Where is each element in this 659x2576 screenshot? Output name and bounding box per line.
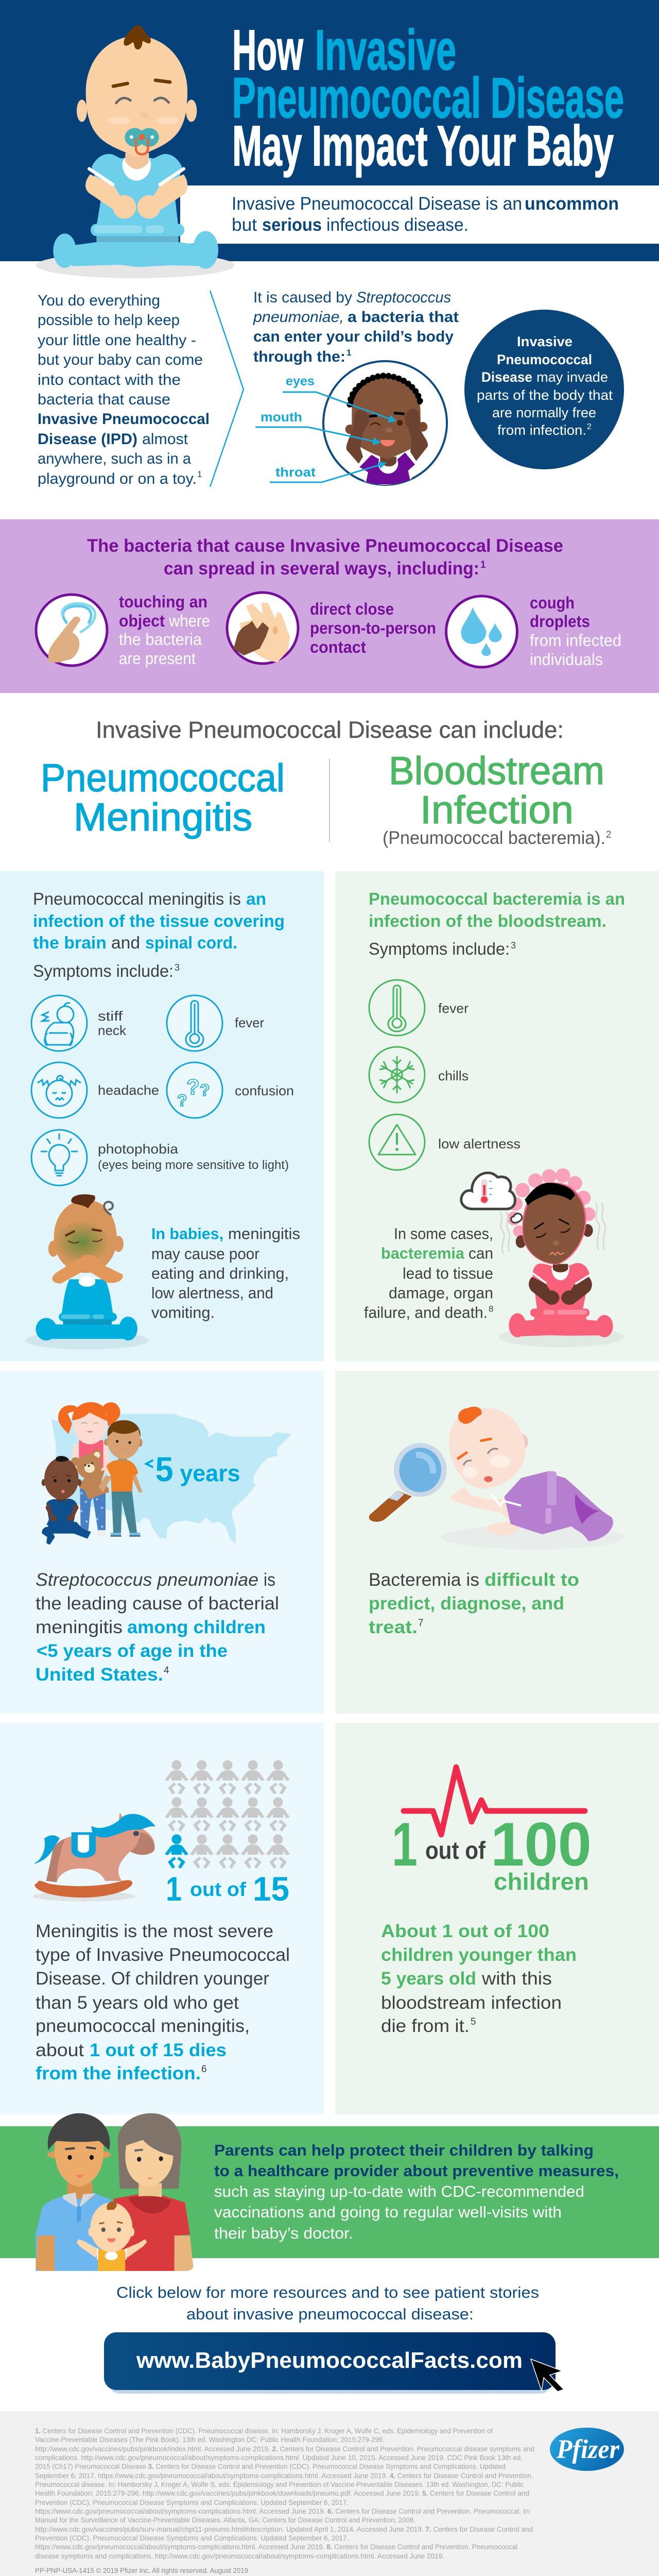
text: cough droplets: droplets bbox=[530, 612, 590, 631]
text block: intro paragraph: into contact with the bbox=[38, 371, 181, 388]
text: severity: pneumococcal meningitis, bbox=[36, 2016, 250, 2036]
text: in babies: vomiting. bbox=[151, 1303, 215, 1321]
panel: parents can help bbox=[0, 2113, 659, 2271]
text: bacteremia outcome: 8 bbox=[489, 1304, 493, 1314]
text block: intro paragraph: possible to help keep bbox=[38, 312, 180, 329]
text: severity bbox=[36, 1921, 290, 2083]
text block: cause bbox=[253, 289, 459, 365]
text: protect children: Parents can help protect their children by talking bbox=[214, 2141, 594, 2159]
subtitle: serious bbox=[262, 215, 322, 235]
panel: references footer bbox=[0, 2411, 659, 2576]
text: mortality: with this bbox=[481, 1969, 552, 1989]
icon: droplets bbox=[446, 596, 517, 667]
text: leading cause: among children bbox=[127, 1617, 266, 1637]
eyes label: eyes bbox=[286, 374, 315, 388]
references: Vaccine-Preventable Diseases (The Pink Book). 13th ed. Washington DC: Public Health Foundation; 2015:279-296. bbox=[35, 2435, 385, 2444]
text: difficult to diagnose bbox=[369, 1570, 579, 1637]
text: in babies: low alertness, and bbox=[151, 1284, 273, 1302]
stat: 1 out of 15: 1 bbox=[166, 1870, 182, 1908]
panel: how bacteria spread bbox=[0, 519, 659, 693]
references: Prevention (CDC). Pneumococcal Disease Symptoms and Complications. Updated September 6, 2017. bbox=[35, 2534, 349, 2542]
callout circle: IPD definition: parts of the body that bbox=[477, 387, 613, 403]
heading: bloodstream infection: 2 bbox=[606, 829, 612, 840]
text: severity: Meningitis is the most severe bbox=[36, 1921, 273, 1941]
icon: confusion: ? bbox=[177, 1091, 187, 1110]
text: bacteremia outcome: In some cases, bbox=[394, 1225, 493, 1243]
references: disease symptoms and complications. http://www.cdc.gov/pneumococcal/about/symptoms-complications.html. Accessed June 2019. bbox=[35, 2552, 444, 2560]
panel: meningitis under 5 years bbox=[0, 1371, 324, 1714]
definition text bbox=[369, 889, 625, 958]
stat: 1 out of 100 children: out of bbox=[425, 1837, 486, 1865]
text: severity: than 5 years old who get bbox=[36, 1993, 239, 2013]
text: in babies: In babies, bbox=[151, 1225, 223, 1243]
definition text: the brain bbox=[33, 933, 107, 952]
text: in babies: meningitis bbox=[228, 1225, 300, 1243]
text block: cause: Streptococcus bbox=[356, 289, 451, 306]
panel: bacteremia symptoms bbox=[335, 871, 659, 1361]
text: touching an object: object bbox=[119, 612, 165, 630]
references: September 6, 2017. https://www.cdc.gov/pneumococcal/about/symptoms-complications.html. Accessed June 2019. 4. Centers for Disease Control and Prevention. bbox=[35, 2471, 533, 2480]
panel: meningitis symptoms bbox=[0, 871, 324, 1361]
illustration: US map with children bbox=[42, 1402, 292, 1545]
text: touching an object: touching an bbox=[119, 592, 207, 611]
title bbox=[232, 19, 624, 178]
text: protect children: their baby’s doctor. bbox=[214, 2224, 353, 2242]
text: severity: from the infection. bbox=[36, 2063, 201, 2083]
text: difficult to diagnose: difficult to bbox=[484, 1570, 579, 1590]
text: leading cause: Streptococcus pneumoniae bbox=[36, 1570, 258, 1590]
text: touching an object bbox=[119, 592, 210, 668]
text block: intro paragraph: almost bbox=[142, 431, 188, 448]
text: touching an object: the bacteria bbox=[119, 630, 202, 649]
stat: 1 out of 15 bbox=[166, 1870, 289, 1908]
text: protect children: such as staying up-to-date with CDC-recommended bbox=[214, 2182, 584, 2200]
text block: intro paragraph: Invasive Pneumococcal bbox=[38, 411, 210, 428]
pictogram: 1 of 15 children bbox=[165, 1760, 290, 1869]
text: direct contact: direct close bbox=[310, 600, 394, 618]
references: http://www.cdc.gov/vaccines/pubs/pinkbook/index.html. Accessed June 2019. 2. Centers for Disease Control and Prevention. Pneumococcal disease symptoms and bbox=[35, 2445, 534, 2453]
heading: pneumococcal meningitis: Pneumococcal bbox=[41, 756, 285, 800]
text: mortality: bloodstream infection bbox=[381, 1993, 562, 2013]
button: website link: www.BabyPneumococcalFacts.com bbox=[136, 2348, 523, 2373]
heading: can spread in several ways, including: bbox=[164, 558, 479, 579]
text block: intro paragraph: You do everything bbox=[38, 292, 160, 309]
subtitle: uncommon bbox=[525, 194, 619, 214]
text block: cause: 1 bbox=[346, 348, 351, 358]
title: Invasive bbox=[315, 19, 456, 82]
text block: cause: pneumoniae, bbox=[253, 309, 344, 326]
label: photophobia: (eyes being more sensitive to light) bbox=[98, 1158, 289, 1172]
stat: 1 out of 15: out of bbox=[190, 1879, 246, 1901]
text: in babies: eating and drinking, bbox=[151, 1264, 289, 1282]
text: in babies bbox=[151, 1225, 300, 1321]
mouth label bbox=[255, 410, 380, 444]
references: 2015 (Ch17) Pneumococcal Disease 3. Centers for Disease Control and Prevention (CDC). Pneumococcal Disease Symptoms and Complications. Updated bbox=[35, 2462, 506, 2470]
references: https://www.cdc.gov/pneumococcal/about/symptoms-complications.html. Accessed June 2019. 6. Centers for Disease Control and Prevention. Pneumococcal. In: bbox=[35, 2507, 531, 2515]
illustration: feverish baby bbox=[461, 1168, 624, 1347]
text: protect children bbox=[214, 2141, 619, 2242]
text block: intro paragraph: but your baby can come bbox=[38, 351, 203, 368]
references: Prevention (CDC). Pneumococcal Disease Symptoms and Complications. Updated September 6, 2017. bbox=[35, 2498, 349, 2506]
definition text: spinal cord. bbox=[145, 933, 237, 952]
text block: cause: can enter your child’s body bbox=[253, 328, 454, 345]
text: leading cause: is bbox=[264, 1570, 275, 1590]
label: stiff neck: neck bbox=[98, 1023, 127, 1038]
text: bacteremia outcome: damage, organ bbox=[389, 1284, 493, 1302]
illustration: crawling baby with magnifier bbox=[369, 1406, 625, 1549]
text: difficult to diagnose: 7 bbox=[418, 1618, 424, 1629]
text block: intro paragraph: anywhere, such as in a bbox=[38, 450, 191, 467]
subtitle: Invasive Pneumococcal Disease is an bbox=[232, 194, 522, 214]
definition text: and bbox=[111, 933, 140, 952]
references: Manual for the Surveillance of Vaccine-Preventable Diseases. Atlanta, GA: Centers for Disease Control and Prevention; 2008. bbox=[35, 2516, 415, 2524]
text: mortality: children younger than bbox=[381, 1945, 577, 1965]
divider chevron bbox=[210, 291, 244, 487]
references: PP-PNP-USA-1415 © 2019 Pfizer Inc. All rights reserved. August 2019 bbox=[35, 2566, 248, 2574]
text: cough droplets: from infected bbox=[530, 631, 621, 650]
text: bacteremia outcome: can bbox=[469, 1244, 493, 1262]
text: protect children: to a healthcare provider about preventive measures, bbox=[214, 2162, 619, 2180]
icon: hands touching bbox=[227, 592, 298, 664]
heading: 1 bbox=[480, 560, 486, 570]
heading: The bacteria that cause Invasive Pneumococcal Disease bbox=[87, 536, 563, 556]
panel: bacteremia difficult to diagnose bbox=[335, 1371, 659, 1714]
definition text: Pneumococcal meningitis is bbox=[33, 889, 241, 908]
callout circle: IPD definition: Invasive bbox=[517, 334, 573, 349]
references: http://www.cdc.gov/vaccines/pubs/surv-manual/chpt11-pneumo.html#description. Updated April 1, 2014. Accessed June 2019. 7. Centers for Disease Control and bbox=[35, 2525, 533, 2533]
label: under 5 years: 5 bbox=[155, 1451, 174, 1489]
definition text: Pneumococcal bacteremia is an bbox=[369, 889, 625, 908]
callout circle: IPD definition: may invade bbox=[536, 369, 608, 385]
callout circle: IPD definition: are normally free bbox=[492, 405, 596, 420]
panel: bacteremia mortality bbox=[335, 1723, 659, 2114]
text: touching an object: are present bbox=[119, 649, 196, 668]
text: touching an object: where bbox=[168, 612, 210, 630]
stat: 1 out of 100 children: 100 bbox=[491, 1810, 592, 1879]
text block: cause: It is caused by bbox=[253, 289, 352, 306]
text: bacteremia outcome bbox=[364, 1225, 493, 1321]
stat: 1 out of 15: 15 bbox=[253, 1870, 289, 1908]
button: website link bbox=[104, 2332, 564, 2394]
text block: intro paragraph: playground or on a toy. bbox=[38, 470, 197, 487]
text block: intro paragraph bbox=[38, 292, 210, 487]
text: leading cause: United States. bbox=[36, 1665, 163, 1685]
illustration: child in circle bbox=[255, 361, 447, 486]
icon: cursor bbox=[531, 2359, 564, 2392]
label: under 5 years bbox=[146, 1451, 240, 1489]
mouth label: mouth bbox=[261, 410, 302, 425]
references bbox=[35, 2427, 534, 2574]
definition text: Symptoms include: bbox=[33, 961, 174, 980]
text block: click below: about invasive pneumococcal disease: bbox=[186, 2305, 474, 2323]
text: leading cause: <5 years of age in the bbox=[37, 1641, 228, 1661]
title: How bbox=[232, 19, 303, 82]
text block: intro paragraph: bacteria that cause bbox=[38, 391, 170, 408]
text: direct contact: person-to-person bbox=[310, 619, 436, 637]
text: cough droplets: individuals bbox=[530, 650, 603, 669]
heading: bloodstream infection: Bloodstream bbox=[389, 749, 604, 793]
text block: intro paragraph: 1 bbox=[197, 469, 202, 479]
definition text bbox=[33, 889, 285, 980]
text: bacteremia outcome: failure, and death. bbox=[364, 1303, 488, 1321]
subtitle: infectious disease. bbox=[326, 215, 469, 235]
text: in babies: may cause poor bbox=[151, 1245, 259, 1263]
definition text: 3 bbox=[175, 962, 180, 973]
text: cough droplets: cough bbox=[530, 594, 575, 612]
stat: 1 out of 100 children bbox=[392, 1810, 592, 1895]
icon: touching an object bbox=[36, 595, 107, 666]
icon: confusion: ? bbox=[186, 1075, 200, 1099]
text: leading cause: meningitis bbox=[36, 1617, 123, 1637]
text: severity: 1 out of 15 dies bbox=[90, 2040, 227, 2060]
text: severity: about bbox=[36, 2040, 84, 2060]
callout circle: IPD definition: Disease bbox=[481, 369, 532, 385]
illustration: sick baby bbox=[25, 1194, 149, 1349]
text: leading cause: 4 bbox=[164, 1665, 169, 1676]
throat label bbox=[270, 462, 386, 482]
label: chills: chills bbox=[438, 1068, 469, 1083]
illustration: baby with pacifier bbox=[36, 25, 234, 278]
callout circle: IPD definition: Pneumococcal bbox=[497, 352, 592, 367]
heading: pneumococcal meningitis: Meningitis bbox=[74, 795, 252, 839]
subtitle: but bbox=[232, 215, 257, 235]
eyes label bbox=[283, 374, 395, 422]
text: difficult to diagnose: treat. bbox=[369, 1617, 418, 1637]
references: Health Foundation; 2015:279-296. http://www.cdc.gov/vaccines/pubs/pinkbook/downloads/pneumo.pdf. Accessed June 2019. 5. Centers for Disease Control and bbox=[35, 2489, 529, 2497]
text: bacteremia outcome: bacteremia bbox=[381, 1244, 465, 1262]
heading: pneumococcal meningitis bbox=[41, 756, 285, 839]
text: mortality: die from it. bbox=[381, 2016, 470, 2036]
text: direct contact: contact bbox=[310, 638, 366, 656]
definition text: an bbox=[246, 889, 266, 908]
references: https://www.cdc.gov/pneumococcal/about/symptoms-complications.html. Accessed June 2019. 8. Centers for Disease Control and Prevention. Pneumococcal bbox=[35, 2543, 517, 2551]
text: direct contact bbox=[310, 600, 436, 656]
text: difficult to diagnose: predict, diagnose, and bbox=[369, 1594, 564, 1614]
heading: IPD can include: Invasive Pneumococcal Disease can include: bbox=[96, 717, 564, 743]
text: mortality: 5 years old bbox=[381, 1969, 476, 1989]
throat label: throat bbox=[275, 465, 316, 480]
text block: cause: through the: bbox=[253, 348, 345, 365]
text block: intro paragraph: your little one healthy - bbox=[38, 332, 196, 349]
text: leading cause bbox=[36, 1570, 279, 1685]
label: headache: headache bbox=[98, 1082, 159, 1098]
text: severity: 6 bbox=[201, 2064, 207, 2075]
references: complications. http://www.cdc.gov/pneumococcal/about/symptoms-complications.html. Updated June 10, 2015. Accessed June 2019. CDC Pink Book 13th ed. bbox=[35, 2453, 523, 2462]
callout circle: IPD definition bbox=[464, 310, 624, 469]
heading: bloodstream infection: (Pneumococcal bacteremia). bbox=[383, 828, 605, 848]
text block: cause: a bacteria that bbox=[348, 309, 459, 326]
definition text: 3 bbox=[511, 940, 516, 951]
logo: Pfizer bbox=[550, 2428, 624, 2471]
text: difficult to diagnose: Bacteremia is bbox=[369, 1570, 479, 1590]
text block: click below: Click below for more resources and to see patient stories bbox=[116, 2283, 539, 2301]
label: stiff neck: stiff bbox=[98, 1008, 123, 1024]
label: photophobia: photophobia bbox=[98, 1141, 179, 1157]
icon: headache bbox=[31, 1062, 87, 1118]
label: low alertness: low alertness bbox=[438, 1136, 521, 1151]
icon: heartbeat line bbox=[404, 1767, 585, 1835]
references: Pneumococcal disease. In: Hamborsky J, Kroger A, Wolfe S, eds. Epidemiology and Prevention of Vaccine-Preventable Diseases. 13th ed. Washington, DC: Public bbox=[35, 2480, 524, 2488]
text: mortality bbox=[381, 1921, 577, 2036]
text: protect children: vaccinations and going to regular well-visits with bbox=[214, 2203, 562, 2221]
icon: fever bbox=[167, 995, 222, 1051]
text: mortality: 5 bbox=[471, 2016, 476, 2027]
heading: bloodstream infection bbox=[383, 749, 612, 848]
text: mortality: About 1 out of 100 bbox=[381, 1921, 549, 1941]
label: under 5 years: years bbox=[180, 1460, 240, 1486]
definition text: Symptoms include: bbox=[369, 939, 510, 958]
icon: confusion bbox=[167, 1062, 222, 1118]
text block: click below bbox=[116, 2283, 539, 2323]
text block: intro paragraph: Disease (IPD) bbox=[38, 431, 137, 448]
text: severity: Disease. Of children younger bbox=[36, 1969, 269, 1989]
definition text: infection of the bloodstream. bbox=[369, 911, 606, 930]
heading bbox=[87, 536, 563, 579]
logo: Pfizer: Pfizer bbox=[556, 2435, 620, 2464]
callout circle: IPD definition: from infection. bbox=[497, 422, 586, 438]
subtitle bbox=[232, 194, 619, 235]
icon: fever bbox=[369, 980, 425, 1036]
label: fever: fever bbox=[235, 1015, 264, 1030]
panel: header bbox=[0, 0, 659, 278]
illustration: family bbox=[36, 2113, 193, 2271]
text: leading cause: the leading cause of bacterial bbox=[36, 1594, 279, 1614]
label: stiff neck bbox=[98, 1008, 127, 1038]
icon: photophobia bbox=[31, 1130, 87, 1185]
text: severity: type of Invasive Pneumococcal bbox=[36, 1945, 290, 1965]
illustration: rocking horse bbox=[33, 1812, 155, 1902]
text: cough droplets bbox=[530, 594, 621, 669]
stat: 1 out of 100 children: children bbox=[494, 1868, 589, 1895]
icon: confusion: ? bbox=[200, 1081, 210, 1099]
text: bacteremia outcome: lead to tissue bbox=[403, 1264, 493, 1282]
icon: stiff neck bbox=[31, 995, 87, 1051]
label: fever: fever bbox=[438, 1001, 469, 1016]
panel: meningitis severity bbox=[0, 1723, 324, 2114]
stat: 1 out of 100 children: 1 bbox=[392, 1810, 418, 1879]
icon: chills bbox=[369, 1047, 425, 1103]
definition text: infection of the tissue covering bbox=[33, 911, 285, 930]
heading: bloodstream infection: Infection bbox=[420, 788, 574, 832]
icon: low alertness bbox=[369, 1114, 425, 1170]
callout circle: IPD definition: 2 bbox=[587, 422, 592, 431]
label: confusion: confusion bbox=[235, 1083, 294, 1098]
label: photophobia bbox=[98, 1141, 289, 1172]
references: 1. Centers for Disease Control and Prevention (CDC). Pneumococcal disease. In: Hamborsky J, Kroger A, Wolfe C, eds. Epidemiology and Prevention of bbox=[35, 2427, 493, 2435]
